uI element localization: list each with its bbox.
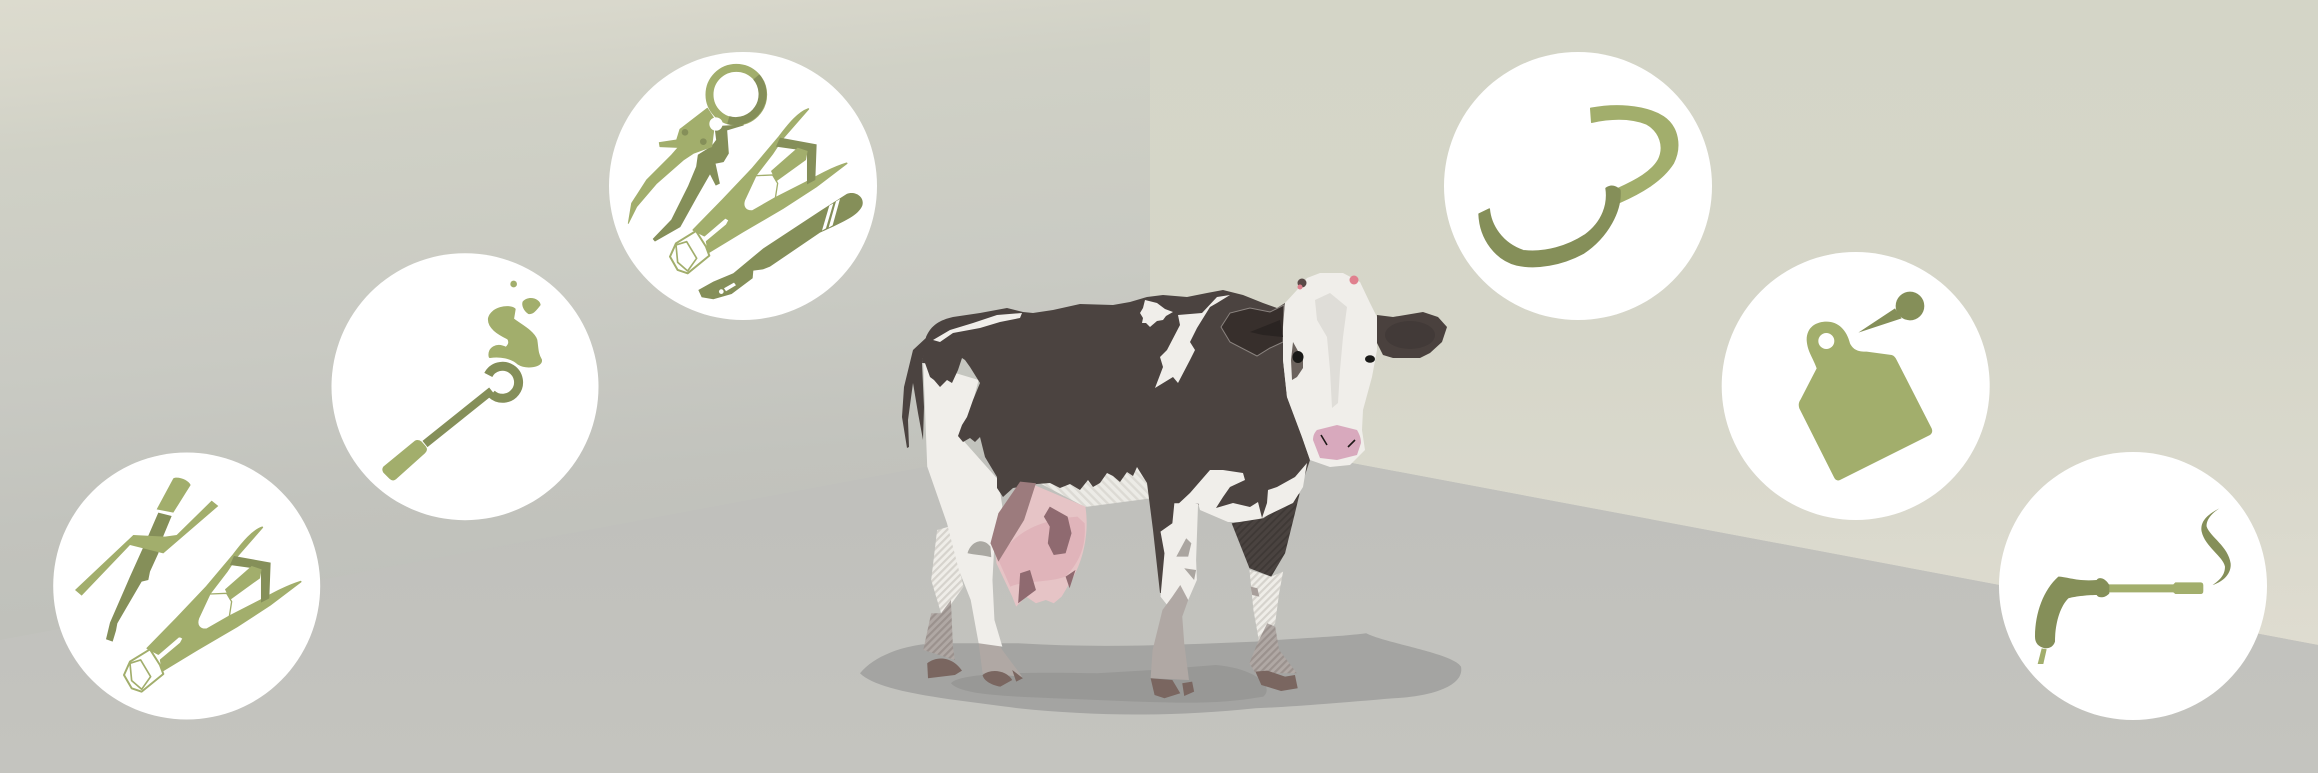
- udder: [990, 482, 1087, 607]
- punch ring: [709, 68, 763, 121]
- white neck streak: [1155, 295, 1230, 388]
- white disc: [1722, 252, 1990, 520]
- cow illustration: [860, 273, 1461, 715]
- rod: [2108, 582, 2203, 594]
- punch dark body: [653, 125, 743, 241]
- rear and far legs: [923, 527, 1298, 691]
- horn buds: [1298, 278, 1306, 288]
- punch pivots: [682, 129, 688, 136]
- white disc: [1999, 452, 2267, 720]
- punch light body and handle: [628, 108, 715, 223]
- pin: [1858, 308, 1902, 333]
- scalpel stripes: [822, 203, 833, 231]
- icon: tool set: [628, 68, 863, 299]
- head: [1283, 273, 1377, 467]
- background: floor: [0, 425, 2318, 773]
- rod: [106, 513, 172, 642]
- tool circle: bander and clamp: [53, 452, 320, 720]
- smoke: [2201, 508, 2231, 585]
- lower arc: [1479, 186, 1620, 267]
- cable: [2038, 648, 2047, 664]
- tool circle: hook: [1444, 52, 1712, 320]
- handle: [382, 440, 427, 480]
- smoke: [489, 307, 541, 366]
- background: right wall: [1150, 0, 2318, 645]
- handle: [157, 478, 191, 513]
- left ear: [1221, 305, 1284, 356]
- clamp: [670, 109, 847, 273]
- icon: castration tools: [75, 478, 301, 692]
- white chest: [1175, 470, 1262, 522]
- tag: [1799, 322, 1932, 480]
- cross arms: [75, 501, 218, 596]
- background: left wall: [0, 0, 1150, 640]
- scalpel slot: [724, 283, 736, 291]
- white shoulder patch: [1140, 300, 1173, 327]
- near foreleg: [968, 503, 1198, 698]
- white disc: [609, 52, 877, 320]
- upper arc: [1591, 106, 1678, 202]
- dark brisket: [1232, 493, 1300, 577]
- tool circle: dehorner, clamp, scalpel: [609, 52, 877, 320]
- rod and ring: [425, 391, 492, 444]
- white disc: [1444, 52, 1712, 320]
- white disc: [332, 253, 598, 520]
- scalpel: [698, 193, 863, 299]
- icon: branding iron with smoke: [382, 281, 541, 480]
- white collar patch: [1262, 463, 1307, 518]
- tool circle: hot iron: [332, 253, 598, 520]
- grip: [2035, 577, 2109, 648]
- tool circle: ear tag: [1722, 252, 1990, 520]
- icon: ear tag with pin: [1799, 292, 1932, 480]
- right ear: [1377, 312, 1447, 358]
- dark body: [922, 290, 1310, 593]
- muzzle: [1313, 425, 1361, 460]
- forehead shading: [1315, 293, 1347, 408]
- white hind quarter: [923, 363, 1002, 647]
- white back stripe: [933, 313, 1022, 342]
- clamp: [124, 527, 301, 692]
- tail: [902, 337, 927, 448]
- ground shadow: [860, 633, 1461, 715]
- tool circle: cautery iron: [1999, 452, 2267, 720]
- belly hatch: [1030, 465, 1153, 507]
- icon: nose hook: [1479, 106, 1678, 267]
- icon: electric dehorner with smoke: [2035, 508, 2231, 664]
- eye patch and eyes: [1291, 342, 1303, 380]
- white disc: [53, 452, 320, 720]
